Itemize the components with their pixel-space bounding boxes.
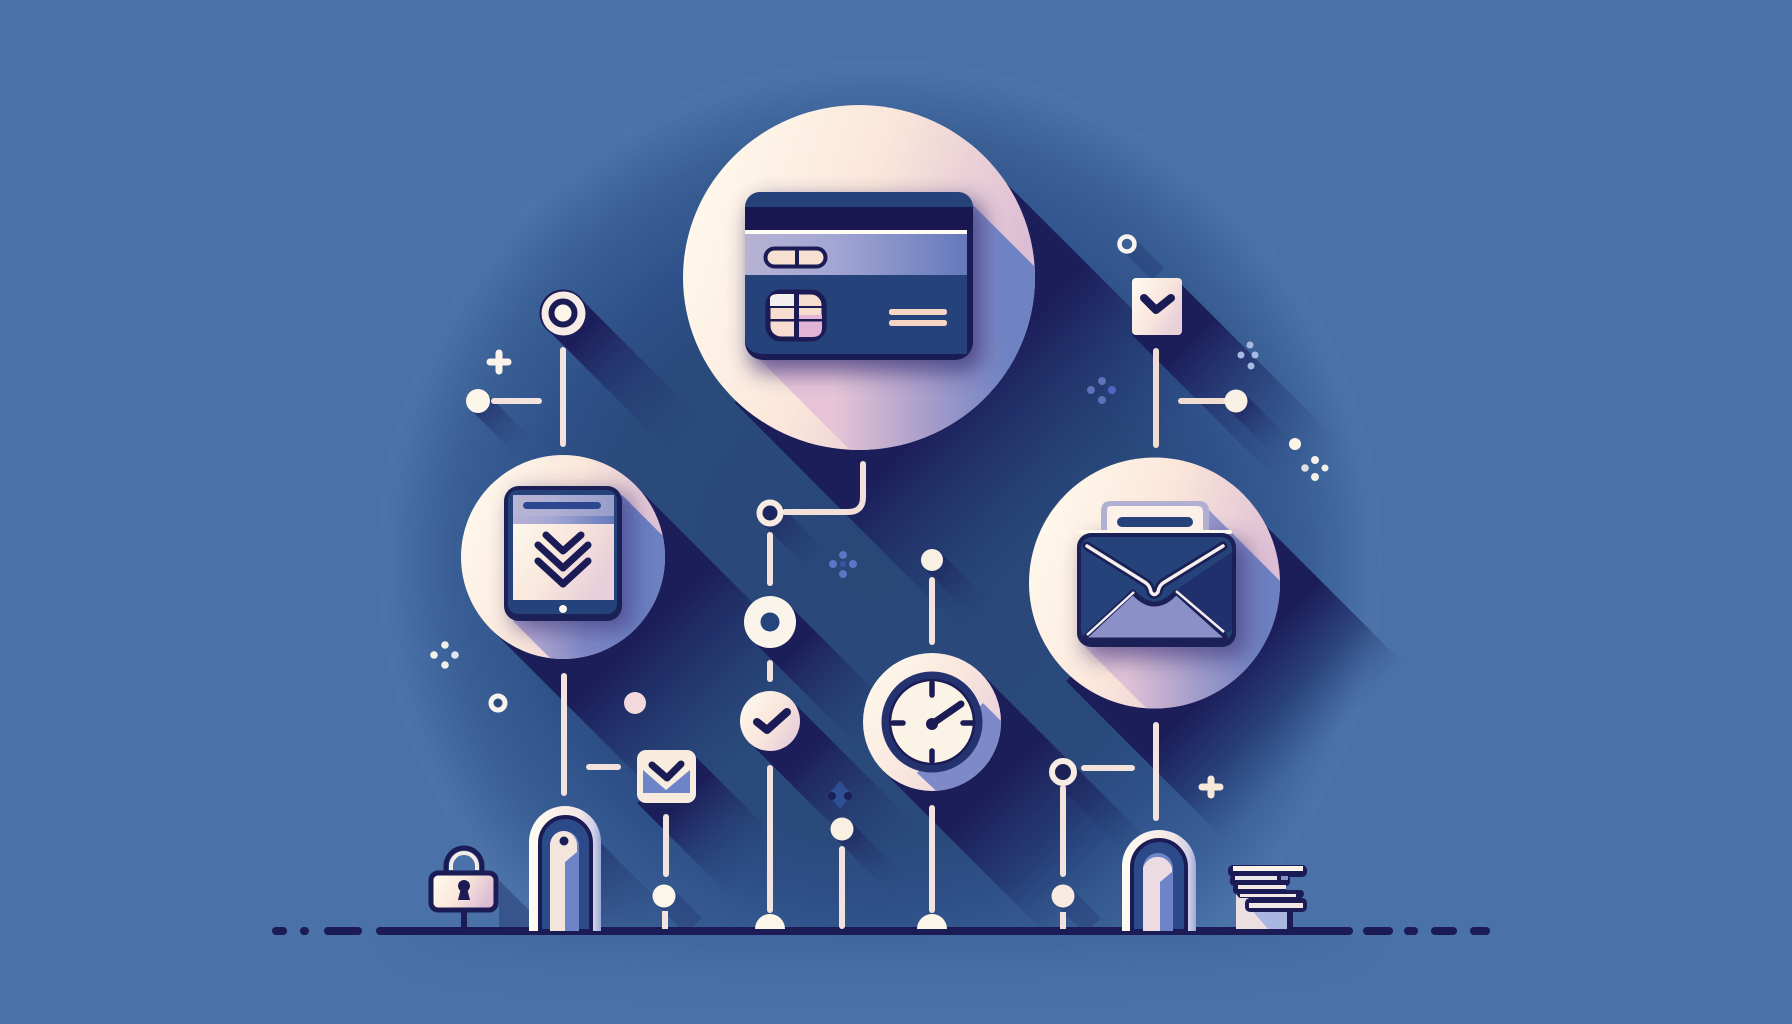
floor glow below baseline [580,935,1180,946]
long shadows [470,177,1420,942]
icon: envelope [1076,530,1236,647]
icon: credit card [745,192,973,360]
panel: clock [863,653,1001,791]
decoration: blue sparkle right [1087,377,1116,404]
node: dot above ground left [652,884,676,908]
node: dot lower right [1052,884,1074,908]
connector lines [491,347,1232,929]
node: dot above clock [921,549,943,571]
decoration: white sparkle right [1301,456,1328,481]
panel: envelope circle [1029,458,1280,708]
panel: tablet circle [461,455,665,659]
decoration: diamond [828,781,852,809]
decoration: white sparkle left [430,641,459,669]
icon: padlock [431,848,496,929]
node: elbow ring [760,502,780,524]
decoration: light sparkle upper right [1238,342,1258,370]
node: check [740,691,800,751]
icon: plus right [1202,779,1220,795]
node: dot center lower [830,818,854,840]
icon: book stack [1228,865,1307,929]
icon: small mail badge [637,750,696,803]
baseline [272,927,1490,935]
icon: letter paper [1101,501,1209,535]
node: top target [540,290,586,336]
icon: plus left [490,353,508,371]
node: small ring top right [1120,236,1134,252]
background halo [416,98,1344,927]
connector: card to steps [785,464,863,512]
node: right dot [1224,390,1248,412]
node: ground dome one [755,914,785,929]
node: donut [744,596,796,648]
icon: left arch [529,806,601,931]
node: pink dot [624,692,646,714]
node: small ring left [491,696,505,710]
decoration: blue sparkle center [829,551,857,578]
node: left dot [466,389,490,413]
icon: tablet [504,486,622,621]
node: ring lower right [1052,761,1074,783]
panel: card circle [683,105,1035,450]
icon: clock face [886,676,978,768]
node: ground dome two [917,914,947,929]
icon: check box top right [1132,278,1182,335]
node: white dot right [1289,438,1301,450]
icon: right arch [1122,830,1196,931]
